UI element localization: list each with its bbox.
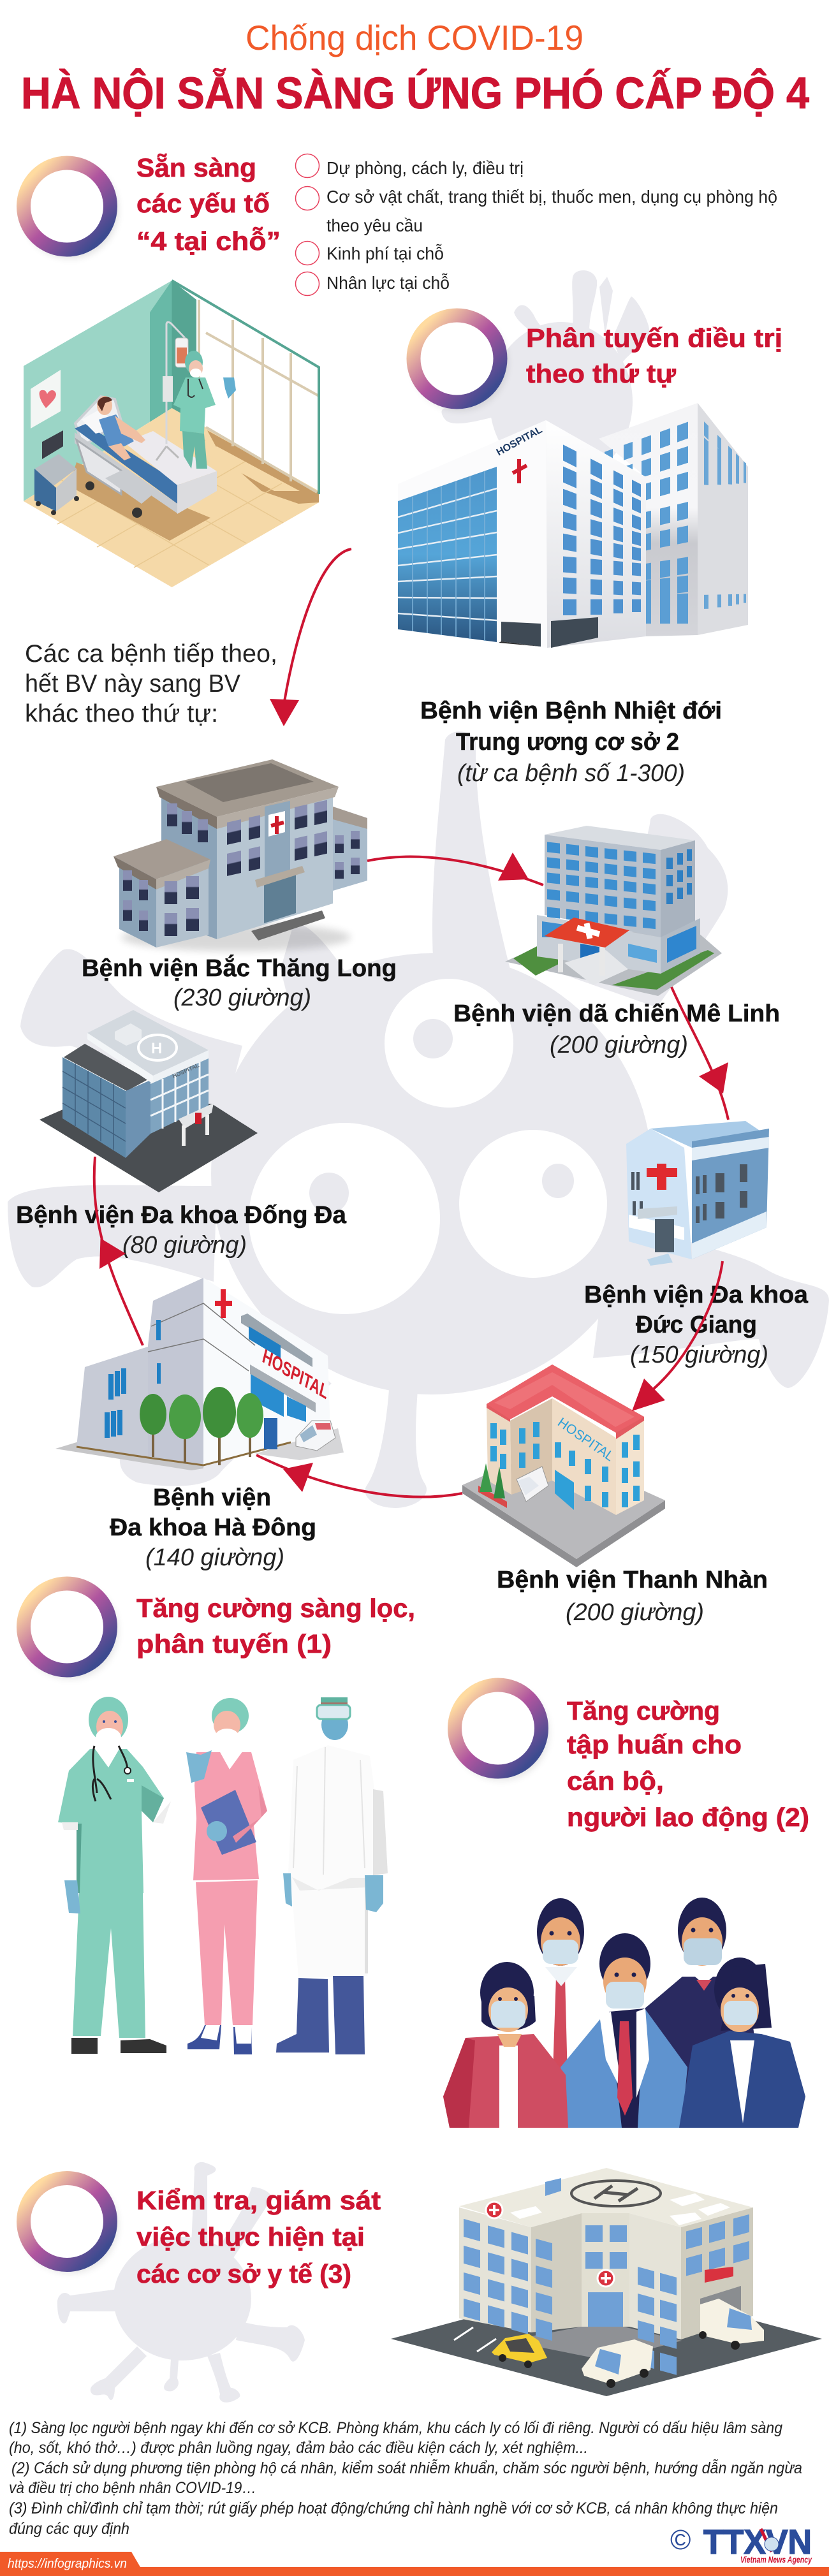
IV pole [166,322,185,444]
shadow and bed [75,397,121,446]
text: Bệnh viện Đa khoa Đức Giang [584,1282,809,1368]
logo: TTXVN: TTXVN [703,2523,812,2561]
heading: kiểm tra giám sát: các cơ sở y tế (3) [136,2259,351,2288]
footer bar [0,2552,829,2576]
text: Bệnh viện dã chiến Mê Linh: (200 giường) [550,1032,688,1058]
text: Bệnh viện Bệnh Nhiệt đới: Trung ương cơ sở 2 [456,729,679,756]
illustration: hospital room [24,281,319,587]
heading: tăng cường tập huấn: Tăng cường [567,1696,720,1725]
text: Bệnh viện Đa khoa Đống Đa [16,1202,347,1259]
text: next cases [25,640,277,728]
icon: ring 2 [413,315,507,410]
center man [561,1933,687,2128]
logo: TTXVN [670,2523,812,2565]
heading: phân tuyến điều trị [526,323,782,388]
text: Bệnh viện Đa khoa Hà Đông: Đa khoa Hà Đông [110,1514,316,1541]
arrows: hospital cycle [94,853,728,1497]
heading: tăng cường tập huấn [567,1696,809,1832]
footnotes: (1) Sàng lọc người bệnh ngay khi đến cơ sở KCB. Phòng khám, khu cách ly có lối đi riêng. Người có dấu hiệu lâm sàng [9,2419,782,2437]
text: Bệnh viện dã chiến Mê Linh: Bệnh viện dã chiến Mê Linh [453,1000,780,1027]
heading: phân tuyến điều trị: theo thứ tự [526,359,676,388]
monitor and cart [42,430,63,459]
icon: ring 3 [23,1584,117,1678]
text: Bệnh viện Thanh Nhàn [497,1567,768,1626]
footnotes: và điều trị cho bệnh nhân COVID-19… [9,2479,256,2497]
footer bar: https://infographics.vn [8,2557,127,2571]
left woman [443,1962,568,2128]
list: 4 tại chỗ: Kinh phí tại chỗ [326,244,444,263]
heading: phân tuyến điều trị: Phân tuyến điều trị [526,323,782,353]
illustration: Bắc Thăng Long hospital [114,759,367,951]
green doctor [58,1697,171,2054]
icon: ring 5 [23,2178,117,2272]
text: Bệnh viện Đa khoa Đức Giang: (150 giường) [630,1342,768,1368]
illustration: Thanh Nhàn hospital: HOSPITAL [555,1415,617,1464]
title: Chống dịch COVID-19: Chống dịch COVID-19 [246,18,583,57]
arrow: to next hospitals [270,549,351,726]
patient [82,408,115,434]
list: 4 tại chỗ: Dự phòng, cách ly, điều trị [326,158,524,178]
ambulance center [582,2339,653,2384]
icon: ring 4 [454,1685,548,1780]
heading: sẵn sàng 4 tại chỗ: “4 tại chỗ” [136,226,281,256]
footnotes: đúng các quy định [9,2520,129,2538]
text: Bệnh viện Đa khoa Hà Đông: (140 giường) [145,1544,284,1571]
virus holes [249,979,607,1314]
text: Bệnh viện Bệnh Nhiệt đới: (từ ca bệnh số 1-300) [457,760,685,787]
text: Bệnh viện Bắc Thăng Long: (230 giường) [173,984,311,1011]
text: Bệnh viện Bắc Thăng Long [82,954,397,1011]
heading: sẵn sàng 4 tại chỗ: Sẵn sàng [136,152,256,182]
illustration: big hospital: HOSPITAL [495,424,545,458]
logo: TTXVN: © [670,2524,691,2556]
heading: kiểm tra giám sát: Kiểm tra, giám sát [136,2186,381,2215]
text: Bệnh viện Bệnh Nhiệt đới [420,698,722,787]
illustration: medical staff [58,1697,388,2054]
text: Bệnh viện Bắc Thăng Long: Bệnh viện Bắc Thăng Long [82,954,397,982]
text: next cases: Các ca bệnh tiếp theo, [25,640,277,668]
text: next cases: hết BV này sang BV [25,670,240,698]
illustration: masked workers [443,1898,805,2128]
heading: tăng cường tập huấn: người lao động (2) [567,1803,809,1832]
text: Bệnh viện Đa khoa Đức Giang: Bệnh viện Đa khoa [584,1282,809,1308]
footnotes: (3) Đình chỉ/đình chỉ tạm thời; rút giấy phép hoạt động/chứng chỉ hành nghề với cơ sở KCB, cá nhân không thực hiện [9,2499,778,2517]
illustration: Đức Giang hospital [626,1121,769,1266]
big virus background [8,731,829,1508]
virus background: top [441,270,649,481]
text: next cases: khác theo thứ tự: [25,700,218,728]
text: Bệnh viện Thanh Nhàn: (200 giường) [566,1599,704,1626]
illustration: Đống Đa hospital: H [151,1040,162,1057]
back left man [529,1898,593,2128]
illustration: isometric hospital [391,2168,822,2396]
pink nurse [186,1698,267,2054]
yellow taxi [492,2334,547,2363]
text: Bệnh viện Đa khoa Đống Đa: Bệnh viện Đa khoa Đống Đa [16,1202,347,1229]
heading: sẵn sàng 4 tại chỗ [136,152,281,256]
text: Bệnh viện Đa khoa Hà Đông: Bệnh viện [153,1484,271,1511]
heading: tăng cường sàng lọc: Tăng cường sàng lọc, [136,1593,415,1623]
text: Bệnh viện Đa khoa Hà Đông [110,1484,316,1571]
text: Bệnh viện Đa khoa Đống Đa: (80 giường) [122,1232,247,1259]
icon: ring 1 [23,163,117,258]
heading: tăng cường tập huấn: cán bộ, [567,1766,664,1796]
list: 4 tại chỗ: theo yêu cầu [326,216,423,235]
text: Bệnh viện Bệnh Nhiệt đới: Bệnh viện Bệnh Nhiệt đới [420,698,722,724]
illustration: Đống Đa hospital [40,1010,258,1192]
doctor [185,351,203,374]
heading: tăng cường tập huấn: tập huấn cho [567,1730,742,1759]
text: Bệnh viện Đa khoa Đức Giang: Đức Giang [636,1312,757,1338]
list: 4 tại chỗ: Nhân lực tại chỗ [326,273,450,293]
illustration: Đống Đa hospital: HOSPITAL [172,1062,200,1079]
virus background: bottom [57,2162,305,2403]
ambulance right [700,2299,764,2344]
illustration: Thanh Nhàn hospital [462,1365,665,1567]
illustration: big hospital [398,403,748,648]
heading: tăng cường sàng lọc: phân tuyến (1) [136,1629,332,1658]
heading: kiểm tra giám sát [136,2186,381,2288]
list: 4 tại chỗ [296,154,777,296]
heading: sẵn sàng 4 tại chỗ: các yếu tố [136,189,270,218]
footnotes [9,2419,802,2538]
white protective suit [276,1697,388,2054]
right woman [679,1958,805,2128]
footnotes: (ho, sốt, khó thở…) được phân luồng ngay, đảm bảo các điều kiện cách ly, xét nghiệm... [9,2439,588,2457]
text: Bệnh viện dã chiến Mê Linh [453,1000,780,1058]
list: 4 tại chỗ: Cơ sở vật chất, trang thiết bị, thuốc men, dụng cụ phòng hộ [326,187,777,207]
heading: kiểm tra giám sát: việc thực hiện tại [136,2222,365,2251]
illustration: Mê Linh field hospital [505,826,722,996]
poster [31,370,61,428]
illustration: Hà Đông hospital: HOSPITAL [260,1345,330,1403]
back right man [645,1898,765,2128]
illustration: Hà Đông hospital [55,1278,344,1470]
heading: tăng cường sàng lọc [136,1593,415,1658]
text: Bệnh viện Thanh Nhàn: Bệnh viện Thanh Nhàn [497,1567,768,1593]
